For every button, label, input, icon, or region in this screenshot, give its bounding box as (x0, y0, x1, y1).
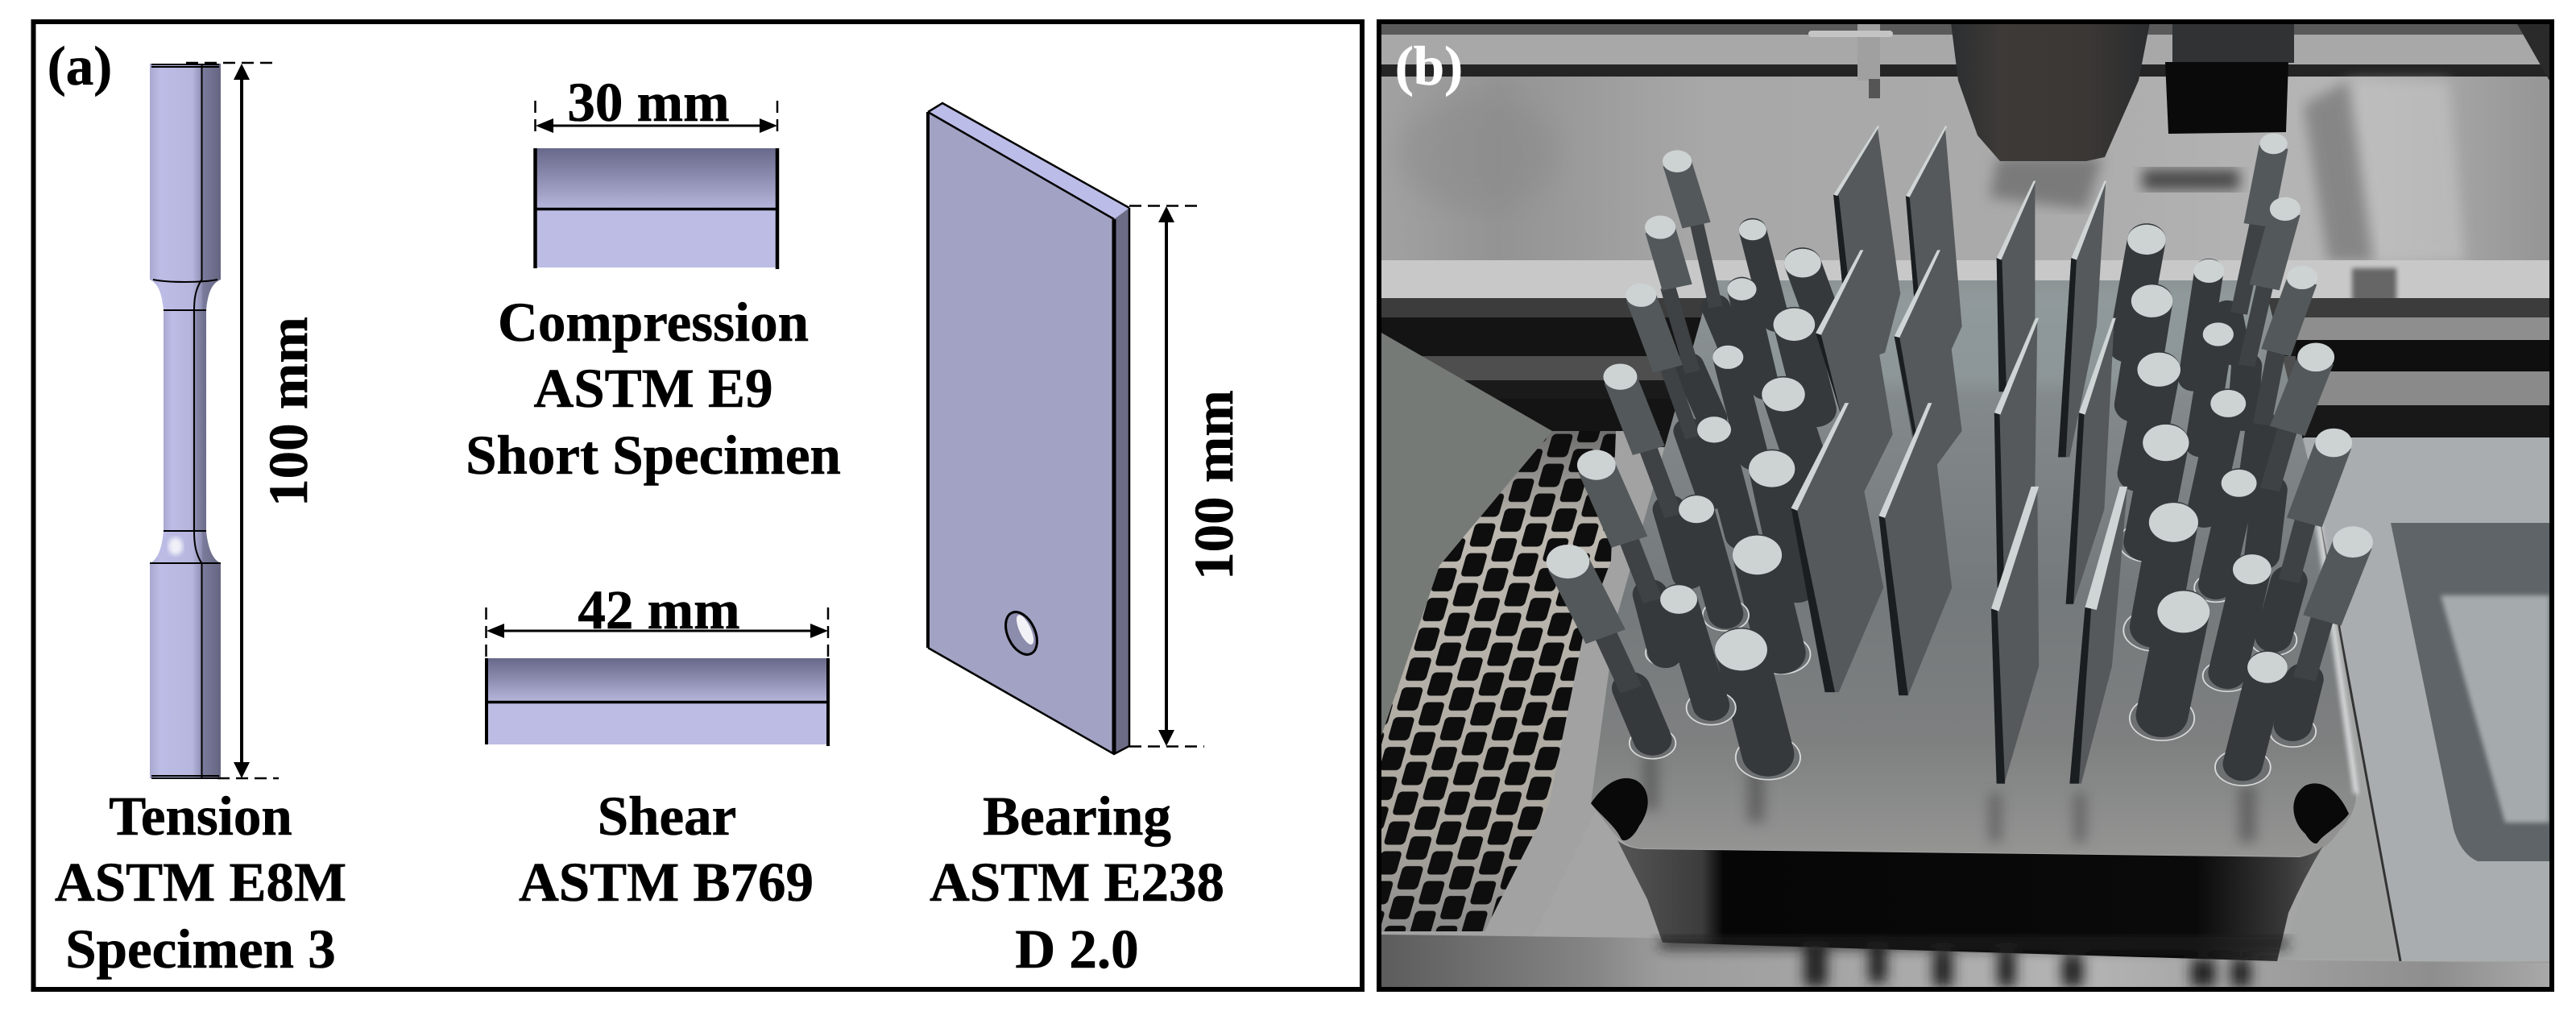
bearing caption: ASTM E238 (930, 852, 1224, 913)
build plate top (1591, 280, 2356, 856)
shadow streaks below block (1659, 939, 2288, 987)
tension specimen drawing (150, 64, 221, 778)
fifth row specimens (1645, 197, 2301, 444)
mesh floor (1381, 431, 1659, 943)
third row specimens (1603, 343, 2334, 602)
bearing caption: D 2.0 (1015, 918, 1139, 980)
bearing dimension: 100 mm: 100 mm (1183, 390, 1245, 580)
photo frame (1379, 22, 2552, 989)
bearing hole (1000, 607, 1043, 660)
tension caption (55, 786, 346, 980)
shear caption: ASTM B769 (519, 852, 814, 913)
front plates (1791, 403, 2127, 784)
panel (a): specimen drawings (34, 22, 1362, 989)
shear caption (519, 786, 814, 913)
compression specimen drawing (535, 148, 777, 269)
compression dimension: 30 mm (535, 72, 777, 134)
tension caption: ASTM E8M (55, 852, 346, 913)
front row specimens (1547, 526, 2373, 786)
bracket (1808, 23, 1893, 98)
compression caption: ASTM E9 (533, 358, 773, 419)
panel (b): photo of printed specimens on build plate (1379, 22, 2553, 989)
compression caption: Compression (498, 292, 809, 353)
recessed tray (2391, 523, 2549, 861)
compression caption: Short Specimen (466, 425, 841, 486)
bottom strip (1381, 935, 2549, 987)
shear specimen drawing (487, 658, 828, 746)
fourth row specimens (1626, 266, 2317, 512)
dark region behind mesh (1539, 438, 1667, 447)
brush (2165, 23, 2294, 134)
tension caption: Specimen 3 (65, 918, 336, 980)
second row specimens (1577, 429, 2352, 691)
bearing caption (930, 786, 1224, 980)
shear dimension: 42 mm (487, 579, 828, 657)
mounting notches (1591, 778, 2349, 844)
bearing caption: Bearing (983, 786, 1171, 847)
roller (1951, 23, 2150, 161)
middle plates (1816, 250, 2116, 604)
specimens, drawn in photo coordinates (1547, 126, 2373, 786)
compression caption (466, 292, 841, 486)
back row specimens (1663, 133, 2288, 379)
tension caption: Tension (109, 786, 292, 847)
soft rod shadows on plate (1643, 753, 2255, 842)
grey cover shape (1381, 333, 1552, 736)
bearing specimen drawing (928, 103, 1129, 754)
panel label (a): (a) (48, 35, 112, 97)
floor (1534, 437, 2549, 962)
bearing dimension: 100 mm (1129, 206, 1245, 746)
machine background (1381, 24, 2553, 987)
build plate front block (1617, 840, 2323, 961)
panel label (b): (b) (1395, 35, 1463, 97)
shear dimension: 42 mm: 42 mm (578, 579, 740, 641)
back plates (1833, 126, 2106, 457)
tension dimension: 100 mm (186, 63, 319, 778)
shear caption: Shear (598, 786, 736, 847)
compression dimension: 30 mm: 30 mm (567, 72, 730, 133)
tension dimension: 100 mm: 100 mm (258, 317, 319, 507)
top-right dark corner (2517, 24, 2549, 81)
